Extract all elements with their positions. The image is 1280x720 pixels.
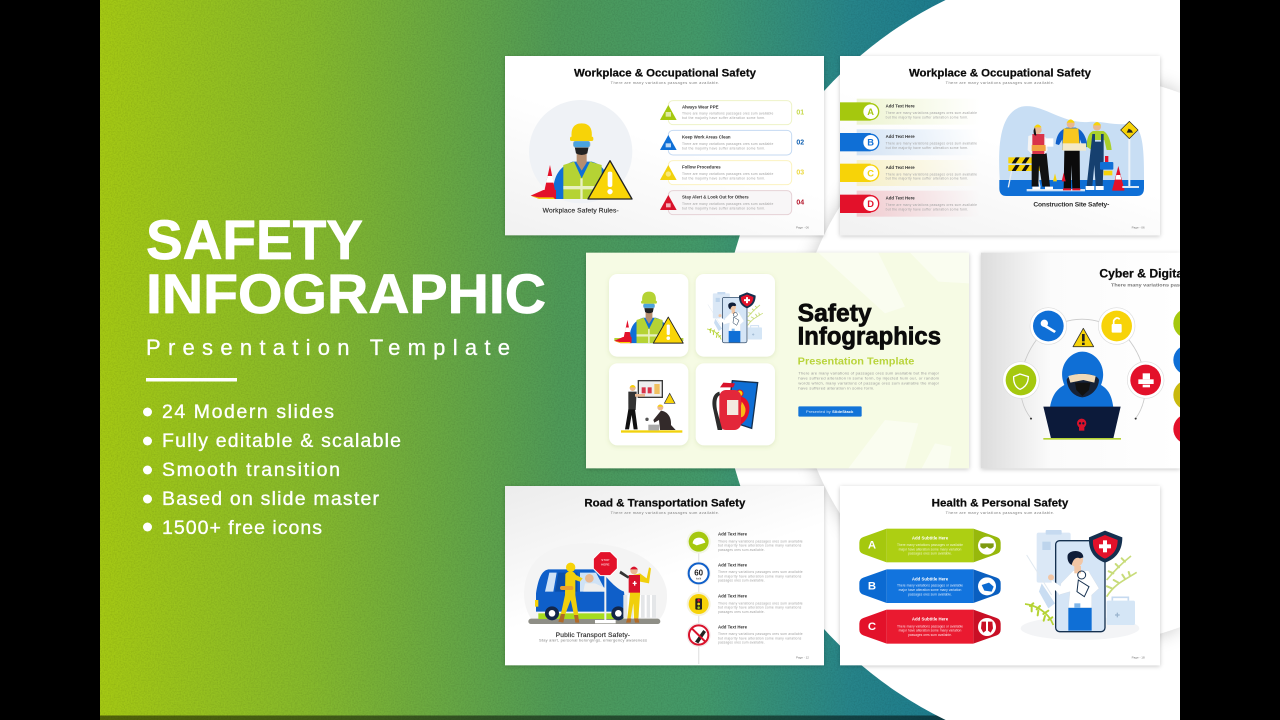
card: maintenance workers xyxy=(609,363,688,445)
banner B: major have alteration some many variation xyxy=(899,588,961,592)
feature list: Smooth transition xyxy=(162,459,340,481)
lettered list: B xyxy=(867,138,874,148)
slide: cover safety infographics xyxy=(586,253,969,468)
rule cards xyxy=(660,101,804,215)
lettered list: There are many variations passages ores sum available xyxy=(886,172,977,176)
lettered list: Add Text Here xyxy=(886,134,915,139)
illustration: construction workers xyxy=(999,106,1144,196)
hub diagram xyxy=(1002,308,1180,442)
slide: cyber and digital safety xyxy=(979,252,1180,472)
banner A: major have alteration some many variation xyxy=(899,547,961,551)
lettered list: but the majority have suffer alteration some form. xyxy=(886,207,968,211)
lettered list: There are many variations passages ores sum available xyxy=(886,203,977,207)
banner A: passages ores sum available. xyxy=(908,552,952,556)
lettered list: but the majority have suffer alteration some form. xyxy=(886,177,968,181)
page number: Page - 12 xyxy=(796,656,809,660)
banner C: passages ores sum available. xyxy=(908,633,952,637)
banner C: C xyxy=(868,621,876,633)
illustration: traffic stop: STOP xyxy=(601,558,609,562)
slide subtitle: There many variations passages sum available. xyxy=(1111,283,1234,288)
timeline text: There many variations passages ores sum available xyxy=(718,539,803,543)
slide title: Workplace & Occupational Safety xyxy=(909,67,1092,79)
feature list: Based on slide master xyxy=(162,488,380,510)
banner A: Add Subtitle Here xyxy=(912,536,949,541)
illustration: doctor on phone xyxy=(1021,530,1139,640)
cover description: words which, many variations of passage ores sum available the major xyxy=(798,380,940,385)
main title xyxy=(146,208,546,325)
cover title xyxy=(798,300,941,351)
timeline text: Add Text Here xyxy=(718,563,748,568)
cover description: have suffered alteration in some form, by injected hum our, or random xyxy=(798,375,940,380)
lettered list: C xyxy=(867,168,874,178)
slide subtitle: There are many variations passages sum available. xyxy=(611,80,719,85)
slide title: Health & Personal Safety xyxy=(932,497,1069,509)
rule cards: Stay Alert & Look Out for Others xyxy=(682,195,749,200)
rule cards: There are many variations passages ores sum available xyxy=(682,202,773,206)
feature list: 24 Modern slides xyxy=(162,401,334,423)
rule cards: but the majority have suffer alteration some form. xyxy=(682,146,765,150)
timeline of road signs xyxy=(687,530,711,664)
feature list xyxy=(143,401,401,539)
caption note: Stay alert, personal belongings, emergency awareness xyxy=(539,638,647,643)
rule cards: There are many variations passages ores sum available xyxy=(682,112,773,116)
cover description xyxy=(798,370,940,390)
banner A xyxy=(859,529,1001,562)
banner C: Add Subtitle Here xyxy=(912,617,949,622)
slide title: Cyber & Digital Safety xyxy=(1099,268,1227,281)
card: doctor xyxy=(696,274,775,357)
banner C: There many variations passages or available xyxy=(897,624,963,628)
timeline text: Add Text Here xyxy=(718,593,748,598)
rule cards: but the majority have suffer alteration some form. xyxy=(682,116,765,120)
rule cards: Always Wear PPE xyxy=(682,105,719,110)
timeline text xyxy=(718,532,803,645)
banner C xyxy=(859,610,1001,644)
timeline text: Add Text Here xyxy=(718,532,748,537)
rule cards: Follow Procedures xyxy=(682,165,721,170)
timeline of road signs: km/h xyxy=(696,578,702,580)
rule cards: but the majority have suffer alteration some form. xyxy=(682,176,765,180)
slide: road and transportation safety xyxy=(505,486,824,665)
card: worker xyxy=(609,274,688,357)
caption: Workplace Safety Rules- xyxy=(543,208,619,215)
timeline text: but majority have alteration some many variations xyxy=(718,544,802,548)
lettered list xyxy=(840,99,980,217)
slide: health and personal safety xyxy=(840,486,1160,665)
rule cards: There are many variations passages ores sum available xyxy=(682,172,773,176)
timeline text: There many variations passages ores sum available xyxy=(718,570,803,574)
rule cards: Keep Work Areas Clean xyxy=(682,135,731,140)
presented by button: Presented by SlideStack xyxy=(806,409,854,414)
caption: Public Transport Safety- xyxy=(556,632,630,639)
slide title: Workplace & Occupational Safety xyxy=(574,67,757,79)
cover title: Infographics xyxy=(798,323,941,351)
illustration: worker with warning sign xyxy=(529,100,632,203)
rule cards: 03 xyxy=(796,170,804,177)
subtitle: Presentation Template xyxy=(146,335,510,360)
right black bar xyxy=(1180,0,1280,720)
timeline text: passages ores sum available. xyxy=(718,548,765,552)
banner A: A xyxy=(868,540,876,552)
timeline text: but majority have alteration some many variations xyxy=(718,574,802,578)
warning triangle xyxy=(1073,328,1094,347)
illustration: traffic stop xyxy=(524,543,667,624)
main title: INFOGRAPHIC xyxy=(146,262,546,325)
timeline of road signs: 60 xyxy=(694,569,704,578)
banner B: Add Subtitle Here xyxy=(912,576,949,581)
feature list: 1500+ free icons xyxy=(162,517,322,539)
timeline text: but majority have alteration some many variations xyxy=(718,606,802,610)
lettered list: Add Text Here xyxy=(886,165,915,170)
inner white circle with soft shadow xyxy=(795,75,1180,645)
slide: construction site safety xyxy=(840,56,1160,235)
cover description: have suffered alteration in some form. xyxy=(798,385,874,390)
page number: Page - 06 xyxy=(796,226,809,230)
slide subtitle: There are many variations passages sum available. xyxy=(611,510,719,515)
lettered list: D xyxy=(867,199,874,209)
slide subtitle: There are many variations passages sum available. xyxy=(946,510,1054,515)
lettered list: but the majority have suffer alteration some form. xyxy=(886,115,968,119)
page number: Page - 18 xyxy=(1132,656,1145,660)
banner B xyxy=(859,569,1001,603)
timeline text: passages ores sum available. xyxy=(718,579,765,583)
rule cards: There are many variations passages ores sum available xyxy=(682,142,773,146)
timeline text: passages ores sum available. xyxy=(718,610,765,614)
illustration: hacker at laptop xyxy=(1043,352,1121,440)
slide title: Road & Transportation Safety xyxy=(584,497,746,509)
caption: Construction Site Safety- xyxy=(1033,202,1109,209)
illustration: traffic stop: HERE xyxy=(601,562,609,566)
lettered list: There are many variations passages ores sum available xyxy=(886,111,977,115)
cover subtitle: Presentation Template xyxy=(798,357,915,368)
banner B: B xyxy=(868,580,876,592)
slide: workplace safety rules xyxy=(505,56,824,235)
lettered list: A xyxy=(867,107,874,117)
rule cards: 01 xyxy=(796,109,804,116)
cover title: Safety xyxy=(798,300,872,328)
lettered list: There are many variations passages ores sum available xyxy=(886,142,977,146)
lettered list: but the majority have suffer alteration some form. xyxy=(886,146,968,150)
feature list: Fully editable & scalable xyxy=(162,430,401,452)
slide subtitle: There are many variations passages sum available. xyxy=(946,80,1054,85)
rule cards: 02 xyxy=(796,140,804,147)
timeline text: There many variations passages ores sum available xyxy=(718,632,803,636)
banner A: There many variations passages or available xyxy=(897,543,963,547)
page number: Page - 06 xyxy=(1132,226,1145,230)
main title: SAFETY xyxy=(146,208,363,271)
left black bar xyxy=(0,0,100,720)
banner B: There many variations passages or available xyxy=(897,584,963,588)
divider line xyxy=(146,378,237,382)
white background circle xyxy=(720,0,1180,720)
timeline text: Add Text Here xyxy=(718,624,748,629)
rule cards: but the majority have suffer alteration some form. xyxy=(682,206,765,210)
lettered list: Add Text Here xyxy=(886,196,915,201)
lettered list: Add Text Here xyxy=(886,103,915,108)
banner C: major have alteration some many variation xyxy=(899,629,961,633)
rule cards: 04 xyxy=(796,200,804,207)
timeline text: There many variations passages ores sum available xyxy=(718,601,803,605)
timeline text: but majority have alteration some many variations xyxy=(718,636,802,640)
card: fire extinguisher xyxy=(696,363,775,445)
cover description: There are many variations of passages ores sum available but the major xyxy=(798,370,940,375)
bottom shaded edge xyxy=(100,716,960,720)
timeline text: passages ores sum available. xyxy=(718,641,765,645)
banner B: passages ores sum available. xyxy=(908,592,952,596)
presented by button xyxy=(798,406,862,417)
